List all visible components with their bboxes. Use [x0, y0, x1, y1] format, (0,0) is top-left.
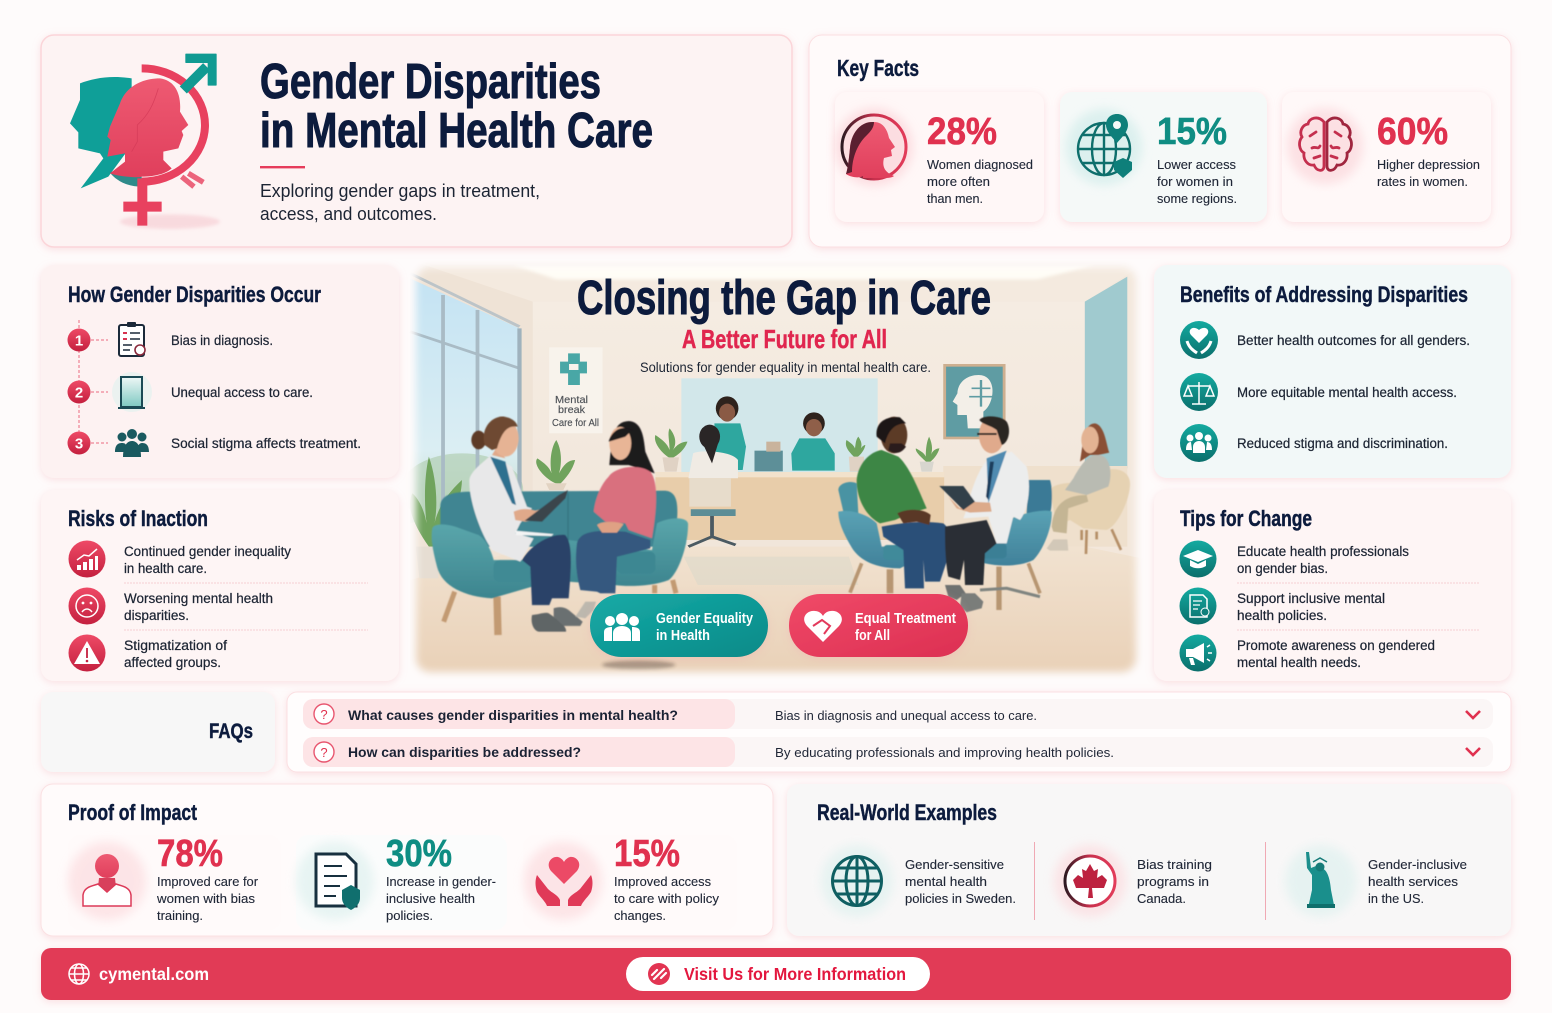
- example: Canada: programs in: [1137, 874, 1209, 889]
- FAQ row 1: Bias in diagnosis and unequal access to care.: [775, 708, 1037, 723]
- card: 15%: Lower access: [1157, 157, 1236, 172]
- tip 3: mental health needs.: [1237, 655, 1361, 670]
- room background: [401, 260, 1150, 680]
- FAQ row 2: How can disparities be addressed?: [348, 744, 581, 760]
- tip 3: [1180, 634, 1435, 672]
- panel: key facts: [809, 35, 1511, 247]
- button: visit us: [626, 957, 930, 991]
- card: 15%: 15%: [1157, 111, 1227, 153]
- title: in Mental Health Care: [260, 104, 653, 158]
- button: visit us: Visit Us for More Information: [684, 964, 906, 984]
- pill shadow: [602, 660, 675, 670]
- card: 60%: Higher depression: [1377, 157, 1480, 172]
- example: US: in the US.: [1368, 891, 1424, 906]
- left group: doctor and patient on teal chairs: [432, 417, 688, 670]
- stat: 78%: women with bias: [156, 891, 255, 906]
- tip 2: health policies.: [1237, 608, 1327, 623]
- stat: 78%: training.: [157, 908, 203, 923]
- card: 28%: than men.: [927, 191, 983, 206]
- step 3: [68, 429, 361, 457]
- risk 2: [68, 588, 273, 624]
- FAQ row 1: [303, 699, 1493, 729]
- card: 28%: more often: [927, 174, 990, 189]
- stat: 15%: to care with policy: [614, 891, 720, 906]
- panel: how gender disparities occur: [41, 265, 399, 478]
- card: 28%: Women diagnosed: [927, 157, 1033, 172]
- tip 2: Support inclusive mental: [1237, 591, 1385, 606]
- panel: risks of inaction: [41, 490, 399, 681]
- heading: key facts: Key Facts: [837, 55, 919, 81]
- risk 1: [68, 540, 291, 578]
- risk 2: Worsening mental health: [124, 591, 273, 606]
- benefit 3: Reduced stigma and discrimination.: [1237, 436, 1448, 451]
- icon: globe: [69, 964, 89, 984]
- step 2: [68, 372, 313, 412]
- step 1: 1: [75, 332, 83, 350]
- heading: closing the gap: Closing the Gap in Care: [577, 272, 991, 325]
- heading: examples: Real-World Examples: [817, 800, 997, 825]
- risk 2: disparities.: [124, 608, 189, 623]
- subtitle: Exploring gender gaps in treatment,: [260, 181, 540, 201]
- card: 60%: rates in women.: [1377, 174, 1468, 189]
- tip 1: Educate health professionals: [1237, 544, 1409, 559]
- illustration: clinic waiting room: [401, 260, 1150, 680]
- benefit 2: More equitable mental health access.: [1237, 385, 1457, 400]
- card: 15%: some regions.: [1157, 191, 1237, 206]
- sign text: [552, 394, 599, 429]
- heading: proof: Proof of Impact: [68, 800, 198, 825]
- step 3: 3: [75, 436, 83, 452]
- risk 3: affected groups.: [124, 655, 221, 670]
- example: US: health services: [1368, 874, 1459, 889]
- heading: tips: Tips for Change: [1180, 506, 1312, 531]
- pill: equal treatment: [789, 594, 968, 657]
- benefit 1: [1180, 321, 1470, 359]
- heading: how disparities occur: How Gender Disparities Occur: [68, 282, 321, 307]
- tip 1: [1180, 540, 1409, 578]
- subtitle: access, and outcomes.: [260, 204, 437, 224]
- example: Sweden: mental health: [905, 874, 987, 889]
- stat: 78%: Improved care for: [157, 874, 259, 889]
- title: [260, 55, 653, 158]
- card: 15%: [1060, 92, 1267, 222]
- example: Sweden: policies in Sweden.: [905, 891, 1016, 906]
- footer bar: [41, 948, 1511, 1000]
- FAQ row 1: ?: [320, 707, 328, 722]
- example: Canada: Canada.: [1137, 891, 1186, 906]
- pill: gender equality: Gender Equality: [656, 611, 753, 627]
- tip 3: Promote awareness on gendered: [1237, 638, 1435, 653]
- stat: 30%: 30%: [386, 833, 452, 875]
- benefit 1: Better health outcomes for all genders.: [1237, 333, 1470, 348]
- risk 1: in health care.: [124, 561, 207, 576]
- sign text: Care for All: [552, 417, 599, 429]
- card: 15%: for women in: [1157, 174, 1233, 189]
- risk 3: Stigmatization of: [124, 638, 227, 653]
- risk 3: [68, 634, 227, 672]
- FAQ row 2: By educating professionals and improving health policies.: [775, 745, 1114, 760]
- tip 1: on gender bias.: [1237, 561, 1328, 576]
- step 3: Social stigma affects treatment.: [171, 436, 361, 451]
- website: cymental.com: [99, 964, 209, 984]
- benefit 2: [1180, 373, 1457, 411]
- panel: proof of impact: [41, 784, 773, 936]
- FAQ row 2: [303, 737, 1493, 767]
- panel: tips for change: [1154, 490, 1511, 681]
- example: Canada: [1054, 845, 1212, 917]
- card: 28%: 28%: [927, 111, 997, 153]
- FAQ row 1: What causes gender disparities in mental health?: [348, 707, 678, 723]
- step 1: [68, 322, 273, 356]
- example: Canada: Bias training: [1137, 857, 1212, 872]
- stat: 78%: 78%: [157, 833, 223, 875]
- example: Sweden: [821, 845, 1016, 917]
- stat: 30%: Increase in gender-: [386, 874, 496, 889]
- pill: gender equality: [590, 594, 768, 657]
- step 2: Unequal access to care.: [171, 385, 313, 400]
- tagline: Solutions for gender equality in mental health care.: [640, 360, 931, 375]
- example: US: Gender-inclusive: [1368, 857, 1467, 872]
- panel: FAQ rows: [287, 692, 1511, 772]
- icon: gender heads and symbols: [70, 54, 220, 229]
- panel: FAQ label: [41, 692, 275, 772]
- panel: real-world examples: [787, 784, 1511, 936]
- example: US: [1285, 845, 1467, 917]
- pill: gender equality: in Health: [656, 628, 710, 644]
- stat: 30%: policies.: [386, 908, 433, 923]
- stat: 30%: inclusive health: [386, 891, 475, 906]
- stat: 15%: 15%: [614, 833, 680, 875]
- card: 60%: 60%: [1377, 111, 1448, 153]
- panel: central clinic illustration: [401, 260, 1150, 680]
- heading: benefits: Benefits of Addressing Disparities: [1180, 282, 1468, 307]
- panel: FAQ label: FAQs: [209, 720, 253, 743]
- right group: doctor, patient and waiting woman: [838, 416, 1130, 612]
- title: Gender Disparities: [260, 55, 601, 109]
- stat: 78%: [68, 833, 281, 930]
- card: 28%: [835, 92, 1044, 222]
- stat: 30%: [296, 833, 507, 930]
- pill: equal treatment: for All: [855, 628, 890, 644]
- card: 60%: [1282, 92, 1491, 222]
- stat: 15%: changes.: [614, 908, 666, 923]
- sign text: break: [558, 404, 586, 416]
- risk 1: Continued gender inequality: [124, 544, 291, 559]
- FAQ row 2: ?: [320, 745, 328, 760]
- pill: equal treatment: Equal Treatment: [855, 611, 956, 627]
- stat: 15%: [523, 833, 737, 930]
- subtitle: [260, 181, 540, 224]
- benefit 3: [1180, 424, 1448, 462]
- subheading: A Better Future for All: [682, 324, 887, 354]
- step 1: Bias in diagnosis.: [171, 333, 273, 348]
- panel: hero: [41, 35, 792, 247]
- sign text: Mental: [555, 394, 588, 406]
- heading: risks: Risks of Inaction: [68, 506, 208, 531]
- panel: benefits: [1154, 265, 1511, 478]
- stat: 15%: Improved access: [614, 874, 711, 889]
- step 2: 2: [75, 384, 83, 402]
- example: Sweden: Gender-sensitive: [905, 857, 1004, 872]
- tip 2: [1180, 588, 1385, 624]
